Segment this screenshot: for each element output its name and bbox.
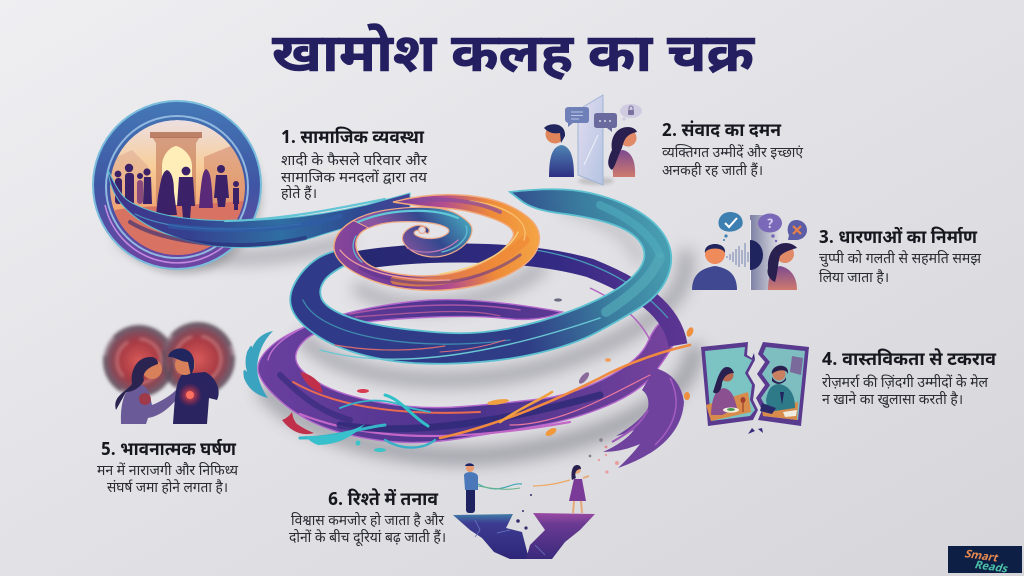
step 1 text: होते हैं।: [281, 184, 317, 204]
step 1 text: 1. सामाजिक व्यवस्था: [281, 127, 425, 151]
inner teal coil: [354, 207, 472, 257]
frayed tail of purple ribbon: [603, 368, 684, 468]
logo: Smart Reads: Smart: [963, 548, 999, 567]
step 5 text: 5. भावनात्मक घर्षण: [101, 438, 236, 463]
step 6 text: विश्वास कमजोर हो जाता है और: [291, 512, 444, 531]
big teal ring: [290, 189, 671, 364]
step 4 text: 4. वास्तविकता से टकराव: [822, 349, 997, 373]
step 4 text: रोज़मर्रा की ज़िंदगी उम्मीदों के मेल: [822, 373, 989, 393]
orange spiral: [334, 195, 539, 290]
outer band streaks: [340, 200, 525, 283]
title: खामोश कलह का चक्र: [272, 23, 755, 93]
inner coil highlights: [353, 211, 467, 262]
step 3 text: लिया जाता है।: [819, 269, 889, 288]
ribbon sweeping across ring: [108, 170, 410, 248]
icon: man and woman with thought bubbles: [692, 212, 807, 290]
icon: glass wall between two people: [544, 95, 642, 185]
panel: step 6 strain: [289, 454, 619, 559]
panel: step 4 reality clash: [701, 342, 997, 434]
logo: Smart Reads: [948, 546, 1022, 576]
step 6 text: 6. रिश्ते में तनाव: [328, 488, 439, 513]
panel: step 3 assumptions: [692, 212, 981, 290]
ring medallion: [92, 100, 262, 274]
step 4 text: [822, 349, 997, 410]
panel: step 2 communication: [544, 95, 803, 185]
spiral eye: [418, 226, 426, 234]
step 5 text: [97, 438, 239, 498]
step 2 text: व्यक्तिगत उम्मीदें और इच्छाएं: [662, 144, 803, 163]
step 2 text: अनकही रह जाती हैं।: [662, 162, 763, 181]
step 3 text: [819, 226, 981, 288]
panel: step 5 emotional friction: [97, 322, 239, 498]
spiral ribbon: teal ring and frayed purple coil: [120, 189, 695, 468]
orange and teal fray strokes: [293, 382, 480, 413]
step 1 text: शादी के फैसले परिवार और: [281, 151, 427, 171]
icon: cracked picture frame: [701, 342, 809, 434]
step 2 text: 2. संवाद का दमन: [662, 121, 782, 144]
scene: gate and family: [110, 120, 250, 260]
step 6 text: दोनों के बीच दूरियां बढ़ जाती हैं।: [289, 528, 446, 548]
ribbon shadows: [120, 205, 695, 456]
step 3 text: 3. धारणाओं का निर्माण: [819, 226, 978, 251]
step 1 text: [281, 127, 428, 204]
step 5 text: संघर्ष जमा होने लगता है।: [107, 478, 228, 498]
step 5 text: मन में नाराजगी और निफिध्य: [97, 462, 239, 481]
back blue ribbon: [350, 248, 678, 345]
step 6 text: [289, 488, 446, 548]
step 4 text: न खाने का खुलासा करती है।: [822, 390, 963, 410]
colour splashes: [243, 298, 695, 457]
step 2 text: [662, 121, 803, 181]
panel: step 1 social order: [92, 100, 428, 274]
step 3 text: चुप्पी को गलती से सहमति समझ: [819, 249, 981, 269]
icon: couple on split cliffs: [453, 454, 619, 559]
step 1 text: सामाजिक मनदलों द्वारा तय: [281, 169, 428, 188]
icon: man and woman with thought bubbles: ?: [766, 217, 774, 234]
lower frayed purple ribbon: [258, 300, 690, 448]
icon: couple with swirling red auras: [103, 322, 235, 424]
